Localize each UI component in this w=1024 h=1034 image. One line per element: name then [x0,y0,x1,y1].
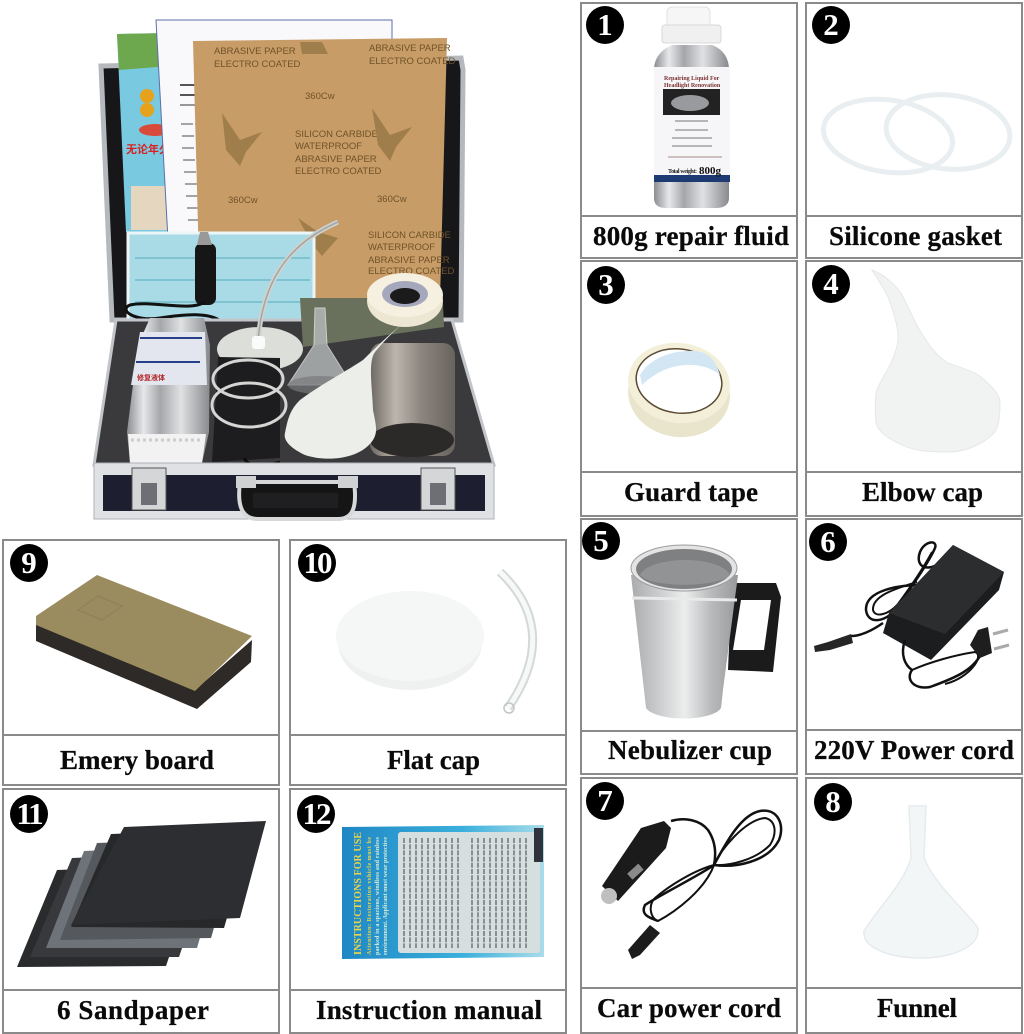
panel 12: instruction manual [290,789,566,1033]
badge 1 [586,6,624,44]
label 7: Car power cord [597,993,781,1023]
badge 2: 2 [823,7,839,42]
gasket rings [819,89,1014,181]
brown abrasive paper: WATERPROOF [295,141,362,152]
badge 12 [297,795,335,833]
badge 11 [10,795,48,833]
panel 2: silicone gasket [806,3,1022,258]
green emery block [300,298,444,347]
silicone rings in tray [212,360,286,427]
brown abrasive paper: ABRASIVE PAPER [369,43,451,54]
brown abrasive paper: SILICON CARBIDE [295,129,378,140]
repair fluid bottle [127,318,210,463]
badge 9 [10,544,48,582]
label 4: Elbow cap [862,477,983,507]
brown abrasive paper: ABRASIVE PAPER [368,255,450,266]
brown abrasive paper: ELECTRO COATED [214,59,301,70]
label 12: Instruction manual [316,995,542,1025]
brown abrasive paper: ABRASIVE PAPER [214,46,296,57]
panel 1: repair fluid [581,3,797,258]
elbow cap in tray [285,322,405,459]
panel 8: funnel [806,778,1022,1033]
brown abrasive paper: 360Cw [305,91,335,102]
badge 5 [582,522,620,560]
panel 11: sandpaper [3,789,279,1033]
sandpaper sheets [17,821,266,967]
emery block [36,575,252,709]
steel cup in tray [370,343,455,457]
label 8: Funnel [877,993,957,1023]
badge 4 [812,265,850,303]
cup [631,545,781,718]
badge 8 [814,783,852,821]
badge 2 [812,6,850,44]
clear funnel in tray [288,308,352,394]
brown abrasive paper: SILICON CARBIDE [368,230,451,241]
repair fluid bottle: 修复液体 [137,373,165,382]
panel 3: guard tape [581,261,797,516]
instruction sheet [156,20,392,240]
label 11: 6 Sandpaper [57,995,209,1025]
car plug and cable [126,232,222,322]
label 9: Emery board [60,745,214,775]
badge 7: 7 [597,783,613,818]
label 2: Silicone gasket [829,221,1002,251]
brown abrasive paper: ELECTRO COATED [368,266,455,277]
suitcase front with latches and handle [94,463,494,519]
brochure [117,33,175,232]
car charger and cable [601,811,781,959]
brown abrasive paper: 360Cw [228,195,258,206]
clear funnel [864,806,978,958]
bottle: Headlight Renovation [664,83,721,89]
lower tray [94,320,494,465]
badge 7 [586,782,624,820]
manual booklet: environment. Applicant must wear protective [383,837,389,955]
badge 6 [809,523,847,561]
flat cap with tube [217,222,338,371]
badge 12: 12 [302,796,331,831]
brown abrasive paper: ELECTRO COATED [369,56,456,67]
badge 10 [298,544,336,582]
cap disc [336,591,484,690]
badge 6: 6 [820,524,836,559]
badge 8: 8 [825,784,841,819]
open suitcase photo [94,20,494,519]
manual booklet [342,825,544,959]
bottle: Repairing Liquid For [664,76,720,82]
brown abrasive paper: WATERPROOF [368,242,435,253]
label 3: Guard tape [624,477,758,507]
badge 10: 10 [304,545,332,580]
tape roll [623,336,735,444]
adapter and cables [814,542,1009,688]
power adapter in tray [212,357,280,466]
badge 9: 9 [21,545,37,580]
bottle [654,7,730,208]
brown abrasive paper [193,38,456,300]
panel 5: nebulizer cup [581,519,797,774]
badge 11: 11 [16,796,42,831]
panel 6: power cord [806,519,1022,774]
label 10: Flat cap [387,745,480,775]
masking tape roll [367,273,443,327]
badge 4: 4 [823,266,839,301]
label 1: 800g repair fluid [593,221,789,251]
brochure: 无论年久 [126,142,170,156]
manual booklet: INSTRUCTIONS FOR USE [353,832,364,955]
bottle: 800g [699,165,722,177]
panel 9: emery board [3,540,279,785]
brown abrasive paper: ELECTRO COATED [295,166,382,177]
clear tube [500,572,533,713]
manual booklet: Attention: Restoration vehicle must be [367,837,373,955]
label 5: Nebulizer cup [608,735,772,765]
manual booklet: parked in a spacious, windless and rainless [375,836,381,955]
bottle: Total weight: [668,169,697,175]
badge 3: 3 [598,267,614,302]
brown abrasive paper: 360Cw [377,194,407,205]
badge 1: 1 [597,7,613,42]
badge 5: 5 [593,523,609,558]
panel 7: car power cord [581,778,797,1033]
badge 3 [587,266,625,304]
panel 10: flat cap [290,540,566,785]
elbow cap shape [872,270,1000,452]
panel 4: elbow cap [806,261,1022,516]
suitcase lid [101,58,463,320]
face mask [128,233,314,321]
brown abrasive paper: ABRASIVE PAPER [295,154,377,165]
label 6: 220V Power cord [814,735,1014,765]
